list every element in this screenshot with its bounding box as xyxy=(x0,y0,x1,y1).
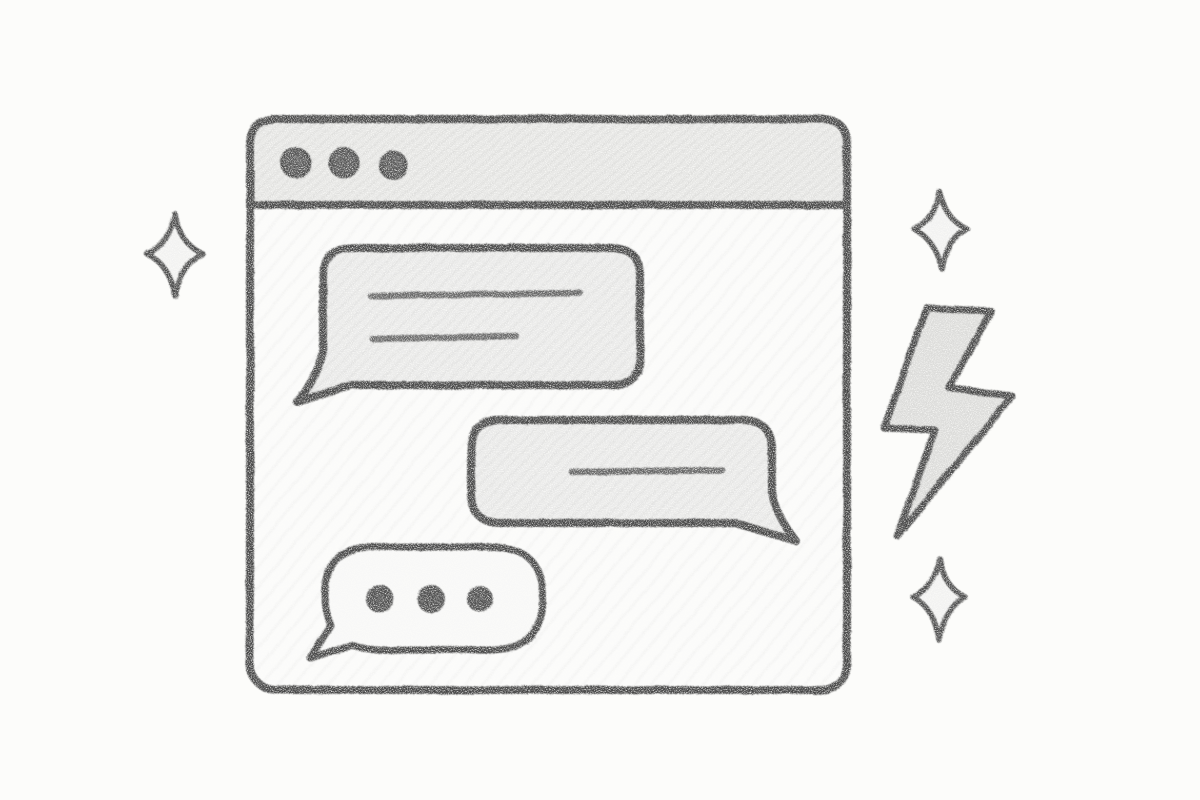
icon: sparkle top right xyxy=(914,192,967,269)
browser window xyxy=(147,119,1012,690)
chat bubble: typing indicator xyxy=(310,547,543,658)
typing dots xyxy=(366,585,493,613)
title bar xyxy=(250,119,847,205)
message line two xyxy=(373,336,516,339)
window control dots xyxy=(282,149,406,178)
chat bubble: right reply xyxy=(471,420,796,541)
reply line xyxy=(572,470,722,472)
window body xyxy=(250,119,847,690)
icon: sparkle bottom right xyxy=(913,559,965,640)
message line one xyxy=(371,293,580,296)
icon: sparkle left xyxy=(147,214,203,296)
icon: lightning bolt xyxy=(884,308,1012,536)
chat bubble: top left message xyxy=(297,248,640,402)
